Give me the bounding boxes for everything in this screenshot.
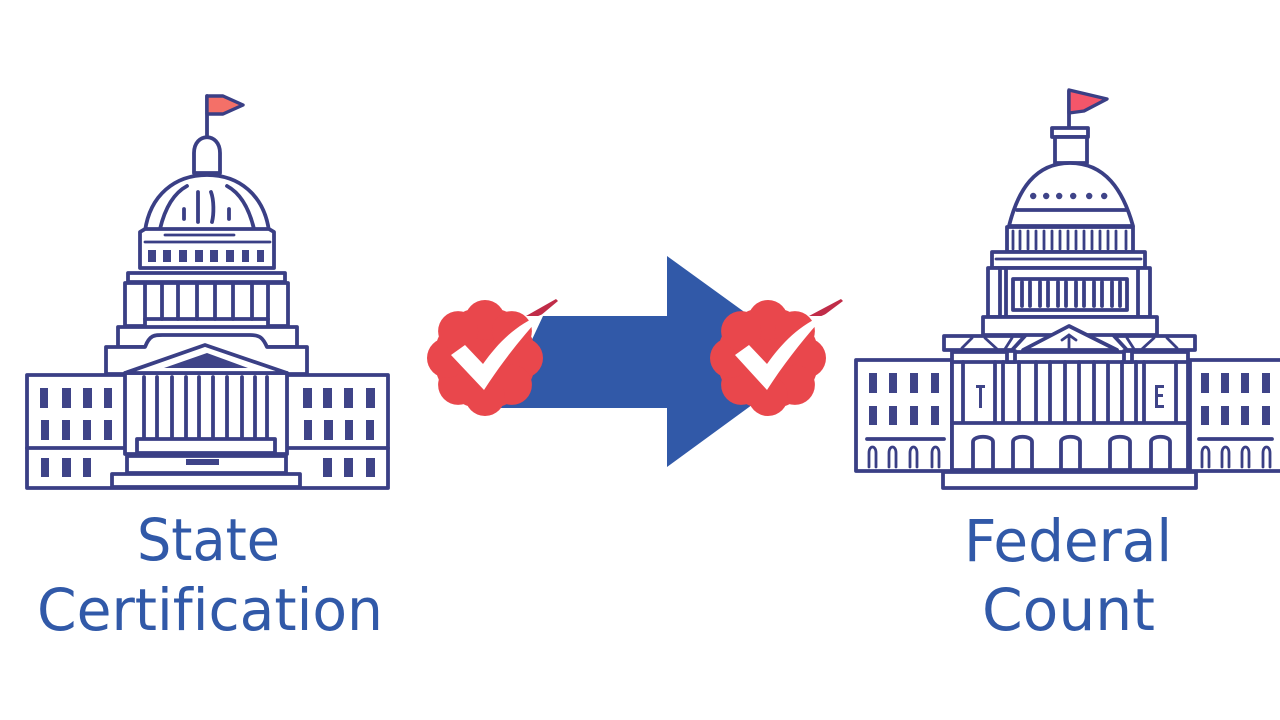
state dome [140,137,274,268]
check tail [526,299,558,316]
icon: federal capitol building [856,90,1280,488]
federal portico [943,326,1196,488]
federal drum [983,252,1157,335]
label: federal count [964,507,1172,644]
check tail [809,299,843,316]
check mark [451,314,543,390]
state portico [112,345,300,487]
federal flag [1069,90,1107,127]
label: state certification: Certification [37,576,383,644]
check mark [735,314,826,390]
label: state certification [37,506,383,644]
federal dome [1007,128,1133,252]
badge: federal check [710,299,843,416]
state wings [27,375,388,488]
badge scallop [427,300,543,416]
badge: state check [427,299,558,416]
badge scallop [710,300,826,416]
label: federal count: Federal [964,507,1172,575]
arrow: state to federal [500,256,812,467]
label: federal count: Count [982,576,1155,644]
state colonnade [106,273,307,374]
label: state certification: State [137,506,280,574]
federal wings [856,360,1280,471]
icon: state capitol building [27,96,388,488]
state flag [207,96,243,136]
